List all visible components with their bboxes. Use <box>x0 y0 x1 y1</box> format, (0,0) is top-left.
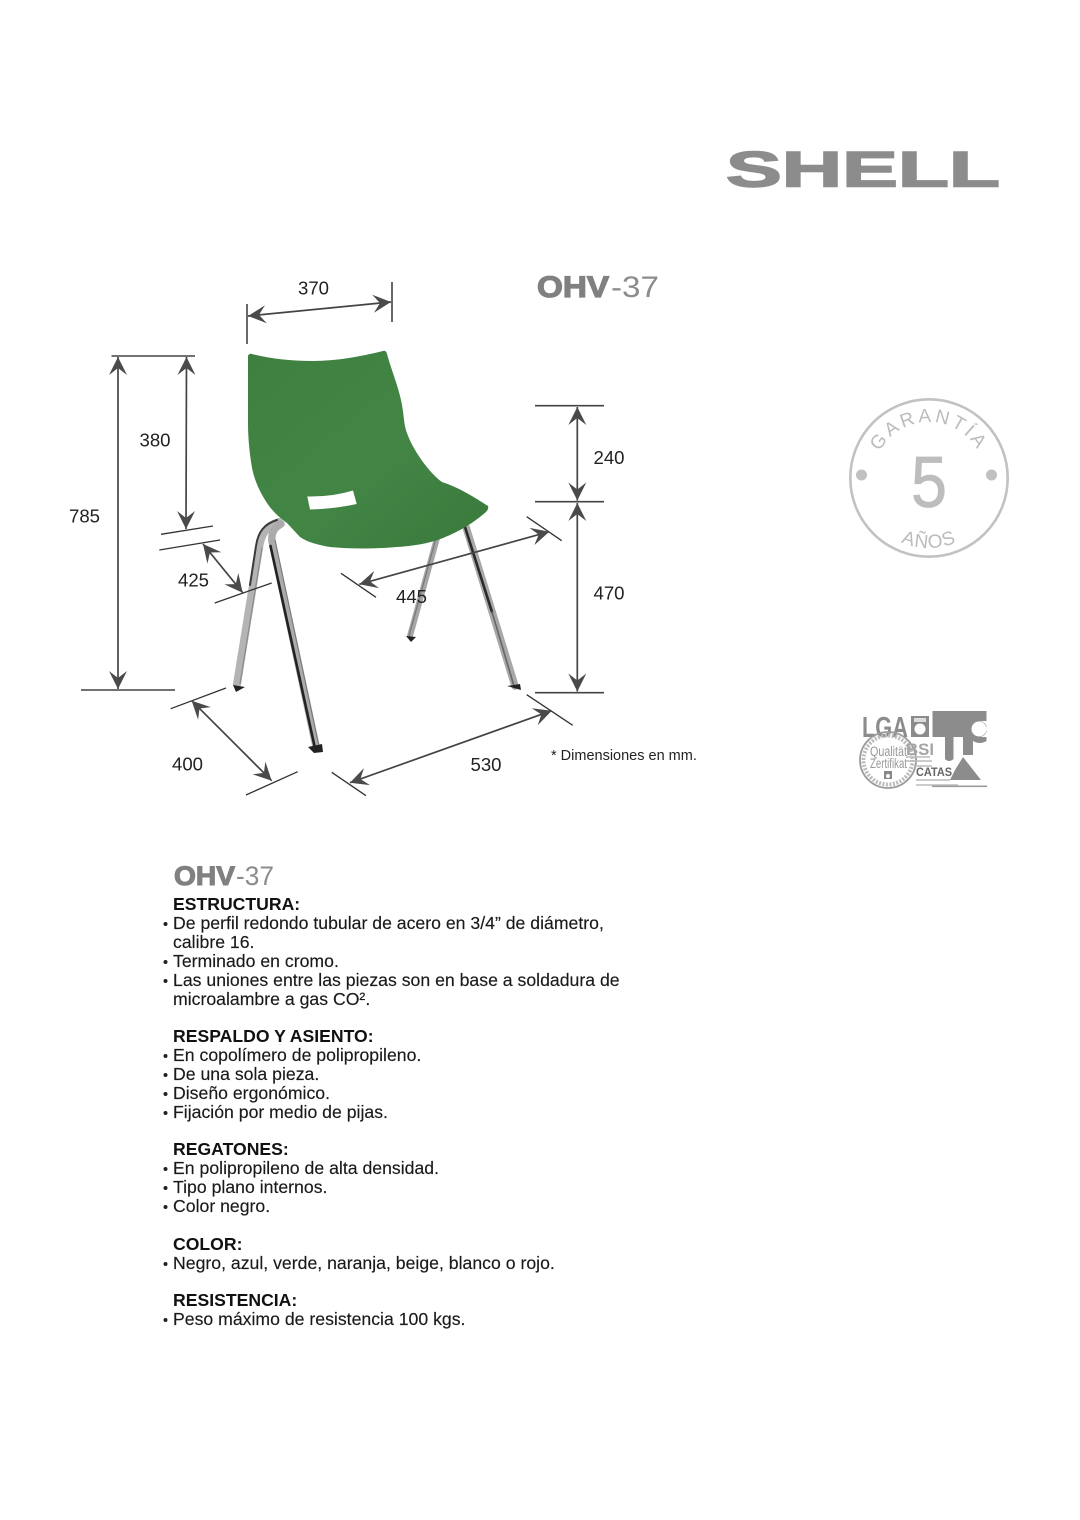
logo: quality seal: Zertifikat <box>870 756 907 771</box>
logo: CATAS: CATAS <box>916 767 952 779</box>
certification logos <box>860 711 987 788</box>
dimension: 400: 400 <box>172 754 203 774</box>
chair legs <box>237 520 515 746</box>
spec heading: OHV-37: OHV <box>174 861 235 891</box>
spec section: respaldo y asiento: En copolímero de polipropileno. <box>173 1045 421 1065</box>
spec section: regatones: En polipropileno de alta densidad. <box>173 1158 439 1178</box>
spec section: respaldo y asiento: Diseño ergonómico. <box>173 1083 330 1103</box>
badge: 5 year warranty: GARANTÍA <box>871 409 985 449</box>
note: units: * Dimensiones en mm. <box>551 748 697 764</box>
spec section: estructura: De perfil redondo tubular de acero en 3/4” de diámetro, <box>173 913 604 933</box>
dimension: 785 <box>69 356 195 690</box>
logo: TN mark <box>932 711 987 787</box>
chair feet <box>233 636 521 753</box>
spec heading: OHV-37: -37 <box>236 861 274 891</box>
model heading: OHV-37: -37 <box>611 271 659 304</box>
logo: SHELL wordmark: SHELL <box>726 142 1000 198</box>
spec section: regatones: Tipo plano internos. <box>173 1177 327 1197</box>
logo: quality seal: Qualität <box>870 744 907 759</box>
spec heading: OHV-37 <box>174 861 274 891</box>
chair seat hand slot <box>307 490 357 510</box>
chair illustration <box>233 351 521 753</box>
spec section: color <box>164 1234 555 1273</box>
spec section: regatones: Color negro. <box>173 1196 270 1216</box>
spec section: respaldo y asiento: De una sola pieza. <box>173 1064 319 1084</box>
spec section: estructura: Las uniones entre las piezas son en base a soldadura de <box>173 970 620 990</box>
chair seat shell <box>248 351 488 548</box>
model heading: OHV-37: OHV <box>537 271 609 304</box>
dimension: 425: 425 <box>178 570 209 590</box>
spec section: resistencia: RESISTENCIA: <box>173 1290 297 1310</box>
dimension: 445 <box>341 517 562 607</box>
dimension: 425 <box>178 544 272 603</box>
spec section: resistencia: Peso máximo de resistencia 100 kgs. <box>173 1309 465 1329</box>
spec section: estructura <box>164 894 620 1009</box>
spec section: estructura: Terminado en cromo. <box>173 951 339 971</box>
spec section: respaldo y asiento: RESPALDO Y ASIENTO: <box>173 1026 374 1046</box>
logo: quality seal <box>860 732 916 788</box>
dimension: 380: 380 <box>139 430 171 450</box>
dimension: 400 <box>171 688 298 795</box>
spec section: regatones <box>164 1139 439 1216</box>
dimension: 785: 785 <box>69 506 100 526</box>
spec section: estructura: calibre 16. <box>173 932 254 952</box>
spec section: color: COLOR: <box>173 1234 242 1254</box>
spec section: respaldo y asiento <box>164 1026 421 1122</box>
dimension: 530: 530 <box>470 754 502 775</box>
badge: 5 year warranty <box>849 398 1009 558</box>
spec section: color: Negro, azul, verde, naranja, beige, blanco o rojo. <box>173 1253 555 1273</box>
logo: LGA: LGA <box>862 712 908 744</box>
dimension: 380 <box>139 357 220 550</box>
badge: 5 year warranty: AÑOS <box>900 530 954 548</box>
spec section: estructura: ESTRUCTURA: <box>173 894 300 914</box>
dimension: 470: 470 <box>593 582 625 604</box>
spec section: respaldo y asiento: Fijación por medio de pijas. <box>173 1102 388 1122</box>
spec section: resistencia <box>164 1290 465 1329</box>
spec section: regatones: REGATONES: <box>173 1139 289 1159</box>
badge: 5 year warranty: 5 <box>911 443 947 523</box>
dimension: 445: 445 <box>396 586 427 607</box>
dimension: 240 <box>535 406 625 502</box>
logo: BSI: BSI <box>906 740 934 759</box>
dimension: 240: 240 <box>593 447 625 468</box>
dimension: 370: 370 <box>298 278 329 298</box>
spec section: estructura: microalambre a gas CO². <box>173 989 370 1009</box>
dimension: 530 <box>332 695 573 796</box>
model heading: OHV-37 <box>537 271 659 304</box>
dimension: 370 <box>247 278 392 344</box>
